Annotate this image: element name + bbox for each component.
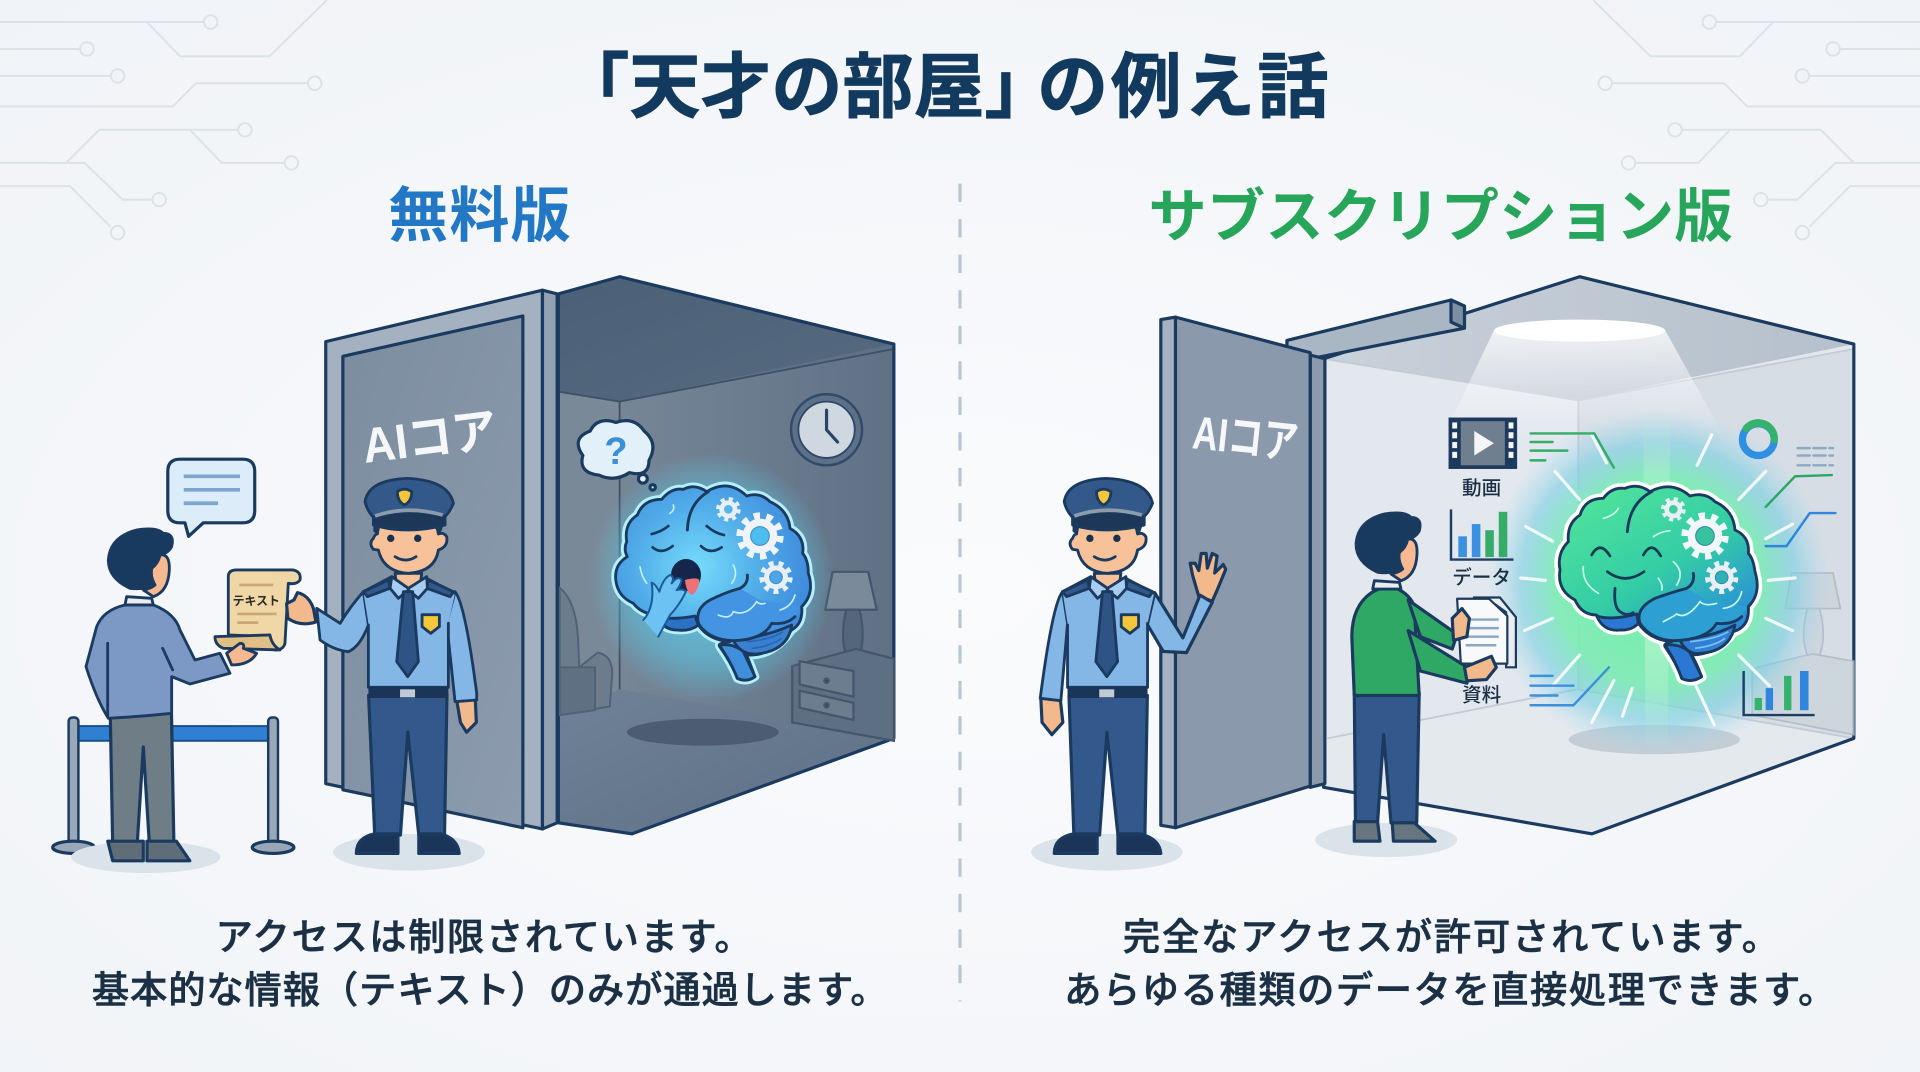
donut chart (1742, 423, 1774, 455)
caption: subscription version (1064, 916, 1835, 1011)
user: visitor with scroll (71, 459, 300, 873)
security guard (287, 478, 485, 871)
door label: AI core: AIコア (1190, 406, 1301, 469)
thought cloud: ? (604, 431, 628, 473)
caption: free version (92, 916, 888, 1011)
sleepy brain (616, 486, 811, 680)
door label: AI core: AIコア (360, 404, 500, 474)
small bar chart (1744, 671, 1815, 715)
wall clock (791, 394, 862, 465)
caption: subscription version: あらゆる種類のデータを直接処理できます。 (1064, 969, 1835, 1011)
panel: subscription version (1031, 184, 1854, 1011)
title: 「天才の部屋 (558, 48, 984, 127)
energetic glow and rays (1487, 408, 1829, 755)
furniture: lamp and nightstand (792, 572, 894, 741)
brain glow (589, 453, 834, 703)
media icon: document with label (1457, 598, 1516, 707)
door with label (326, 290, 557, 829)
open door with label (1161, 300, 1464, 828)
happy brain (1559, 486, 1757, 680)
title: の例え話 (1037, 48, 1329, 127)
title: 」 (984, 48, 1056, 127)
data decorations (1531, 423, 1835, 705)
media icon: data chart (1451, 509, 1513, 589)
scroll: text (215, 570, 300, 650)
panel: free version (53, 182, 894, 1011)
stanchion barrier (53, 718, 294, 853)
closed room (557, 277, 894, 834)
label: video: 動画 (1462, 478, 1501, 500)
ceiling light (1441, 320, 1727, 441)
title (558, 48, 1329, 127)
caption: subscription version: 完全なアクセスが許可されています。 (1123, 916, 1779, 958)
furniture: armchair (560, 588, 612, 715)
floor shadow (627, 719, 779, 746)
speech bubble (168, 459, 255, 536)
label: documents: 資料 (1462, 685, 1501, 707)
caption: free version: アクセスは制限されています。 (216, 916, 752, 958)
heading: free version: 無料版 (388, 182, 571, 249)
heading: subscription version: サブスクリプション版 (1149, 184, 1733, 249)
scroll: text: テキスト (233, 594, 280, 608)
open bright room (1324, 277, 1854, 834)
user: visitor with documents (1315, 513, 1496, 857)
thought cloud (578, 421, 655, 490)
floor shadow (1569, 725, 1740, 754)
ghost furniture (1752, 573, 1854, 735)
media icon: video (1449, 418, 1517, 500)
caption: free version: 基本的な情報（テキスト）のみが通過します。 (92, 969, 888, 1011)
security guard waving (1031, 478, 1226, 871)
label: data: データ (1452, 566, 1511, 589)
